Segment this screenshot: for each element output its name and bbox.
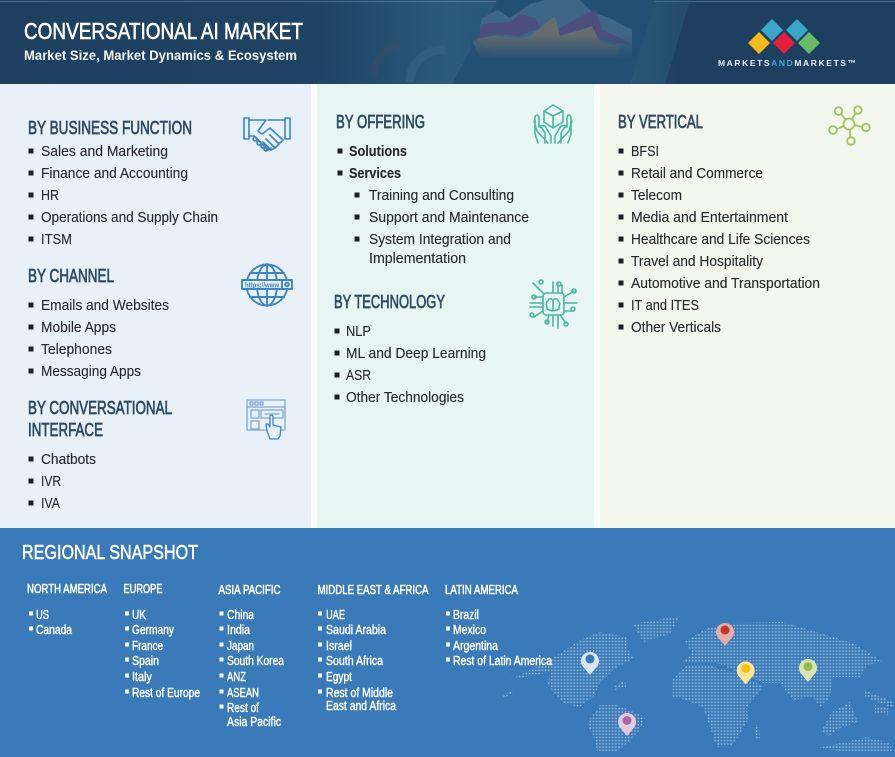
list: offerings: Implementation [369, 251, 466, 267]
region: Europe: Italy [132, 670, 153, 684]
region: Latin America [445, 582, 552, 668]
list: interfaces: IVR [41, 474, 61, 490]
icon: hands holding a box [534, 105, 572, 143]
region: Europe: EUROPE [124, 581, 163, 596]
region: Asia Pacific [218, 582, 284, 729]
region: Asia Pacific: Asia Pacific [227, 715, 281, 729]
heading: by conversational interface: INTERFACE [28, 420, 103, 440]
region: North America [27, 581, 107, 637]
region: Europe: France [132, 639, 163, 653]
list: channels [28, 298, 169, 380]
region: Middle East and Africa: South Africa [326, 654, 383, 668]
region: Middle East and Africa: Egypt [326, 670, 352, 684]
list: business functions: HR [41, 188, 59, 204]
region: Latin America: Rest of Latin America [453, 654, 552, 668]
pin: North America [581, 652, 599, 675]
list: business functions [28, 144, 218, 248]
list: verticals: Travel and Hospitality [631, 254, 764, 270]
region: North America: NORTH AMERICA [27, 581, 107, 596]
region: Latin America: Mexico [453, 623, 486, 637]
heading: by offering: BY OFFERING [336, 112, 425, 132]
region: Middle East and Africa: East and Africa [326, 699, 396, 713]
icon: web form with pointing hand [247, 400, 285, 439]
list: business functions: Sales and Marketing [41, 144, 168, 160]
panel: right column [600, 84, 895, 528]
panel: middle column [317, 84, 594, 528]
region: Middle East and Africa: Rest of Middle [326, 686, 393, 700]
list: interfaces: Chatbots [41, 452, 96, 468]
subtitle: Market Size, Market Dynamics & Ecosystem [24, 48, 297, 63]
heading: by channel: BY CHANNEL [28, 266, 114, 286]
list: channels: Telephones [41, 342, 112, 358]
region: Europe: Rest of Europe [132, 686, 200, 700]
list: offerings: Support and Maintenance [369, 210, 529, 226]
region: Asia Pacific: Rest of [227, 701, 259, 715]
region: Middle East and Africa: MIDDLE EAST & AFRICA [318, 582, 429, 597]
list: verticals: Automotive and Transportation [631, 276, 820, 292]
heading: by conversational interface: BY CONVERSATIONAL [28, 398, 172, 418]
list: business functions: ITSM [41, 232, 72, 248]
panel: left column [0, 84, 311, 528]
list: business functions: Operations and Supply Chain [41, 210, 218, 226]
region: Asia Pacific: China [227, 608, 254, 622]
icon: globe with url bar: https://www [245, 282, 279, 290]
list: verticals: Telecom [631, 188, 682, 204]
list: technologies: NLP [346, 324, 371, 340]
pin: Asia Pacific [799, 659, 817, 682]
region: Middle East and Africa: Saudi Arabia [326, 623, 386, 637]
region: Middle East and Africa: Israel [326, 639, 352, 653]
list: verticals: Retail and Commerce [631, 166, 763, 182]
region: Europe: Germany [132, 623, 175, 637]
list: offerings: Services [349, 166, 401, 182]
world map [500, 616, 895, 752]
region: Asia Pacific: Japan [227, 639, 254, 653]
icon: network nodes [829, 106, 870, 145]
header banner [0, 0, 895, 84]
pin: Middle East and Africa [737, 662, 755, 684]
title: CONVERSATIONAL AI MARKET [24, 18, 303, 44]
list: verticals: BFSI [631, 144, 659, 160]
list: technologies: ASR [346, 368, 371, 384]
list: channels: Messaging Apps [41, 364, 141, 380]
panel: regional snapshot [0, 528, 895, 757]
list: interfaces: IVA [41, 496, 60, 512]
region: Europe: Spain [132, 654, 159, 668]
region: Asia Pacific: ASIA PACIFIC [218, 582, 280, 597]
list: offerings: Training and Consulting [369, 188, 514, 204]
region: Europe: UK [132, 608, 147, 622]
icon: globe with url bar [242, 264, 292, 306]
list: verticals: Other Verticals [631, 320, 721, 336]
heading: by vertical: BY VERTICAL [618, 112, 703, 132]
list: verticals: Media and Entertainment [631, 210, 788, 226]
list: business functions: Finance and Accounting [41, 166, 188, 182]
region: Latin America: LATIN AMERICA [445, 582, 518, 597]
list: verticals [618, 144, 820, 336]
region: Middle East and Africa: UAE [326, 608, 345, 622]
icon: AI chip with brain [530, 280, 577, 328]
region: Asia Pacific: India [227, 623, 250, 637]
list: channels: Mobile Apps [41, 320, 116, 336]
logo: MarketsandMarkets: MARKETSANDMARKETS™ [718, 58, 856, 68]
region: Latin America: Argentina [453, 639, 498, 653]
list: technologies [334, 324, 486, 406]
list: verticals: Healthcare and Life Sciences [631, 232, 810, 248]
region: Middle East and Africa [318, 582, 429, 713]
list: offerings [338, 144, 529, 267]
heading: by conversational interface [28, 398, 172, 440]
region: North America: US [36, 608, 49, 622]
region: Europe [124, 581, 200, 700]
region: Asia Pacific: South Korea [227, 654, 284, 668]
list: verticals: IT and ITES [631, 298, 699, 314]
list: offerings: Solutions [349, 144, 407, 160]
region: Asia Pacific: ASEAN [227, 686, 259, 700]
pin: Latin America [618, 713, 636, 736]
list: interfaces [28, 452, 96, 512]
logo: MarketsandMarkets [718, 19, 856, 68]
region: Asia Pacific: ANZ [227, 670, 246, 684]
heading: by technology: BY TECHNOLOGY [334, 292, 445, 312]
heading: by business function: BY BUSINESS FUNCTION [28, 118, 192, 138]
list: technologies: Other Technologies [346, 390, 464, 406]
list: offerings: System Integration and [369, 232, 511, 248]
list: channels: Emails and Websites [41, 298, 169, 314]
list: technologies: ML and Deep Learning [346, 346, 486, 362]
icon: handshake [244, 118, 290, 151]
pin: Europe [716, 623, 734, 646]
region: North America: Canada [36, 623, 72, 637]
region: Latin America: Brazil [453, 608, 479, 622]
heading: regional snapshot: REGIONAL SNAPSHOT [22, 541, 198, 564]
